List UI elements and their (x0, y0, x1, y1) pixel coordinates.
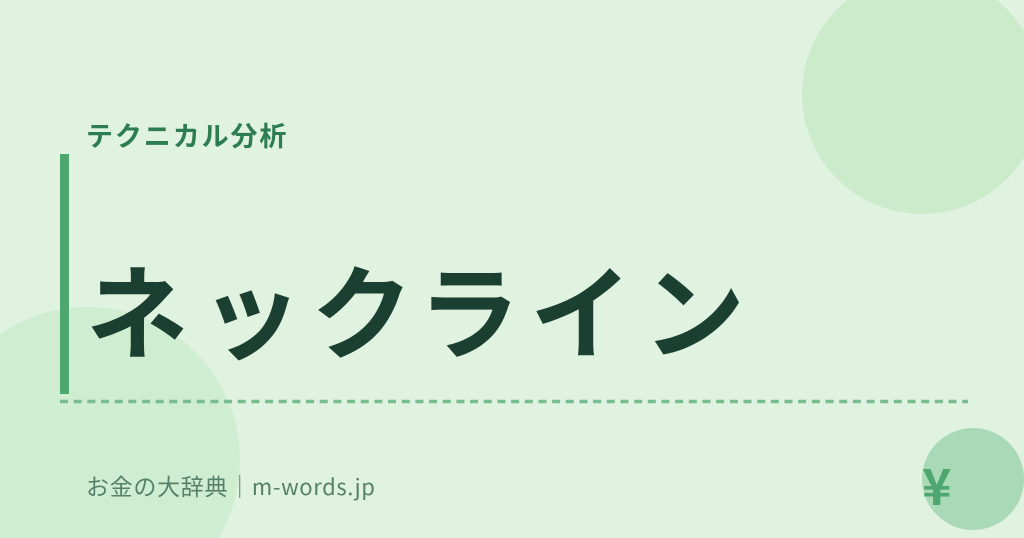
decorative circle: top right (802, 0, 1024, 214)
site credit: お金の大辞典｜m-words.jp (86, 468, 375, 502)
decorative circle: bottom right (922, 428, 1024, 530)
dashed divider (60, 400, 968, 403)
decorative circle: bottom left (0, 307, 240, 538)
category label: テクニカル分析 (86, 115, 288, 154)
icon: yen sign: ¥ (922, 448, 952, 520)
main title: ネックライン (86, 234, 745, 381)
accent bar (60, 154, 69, 394)
